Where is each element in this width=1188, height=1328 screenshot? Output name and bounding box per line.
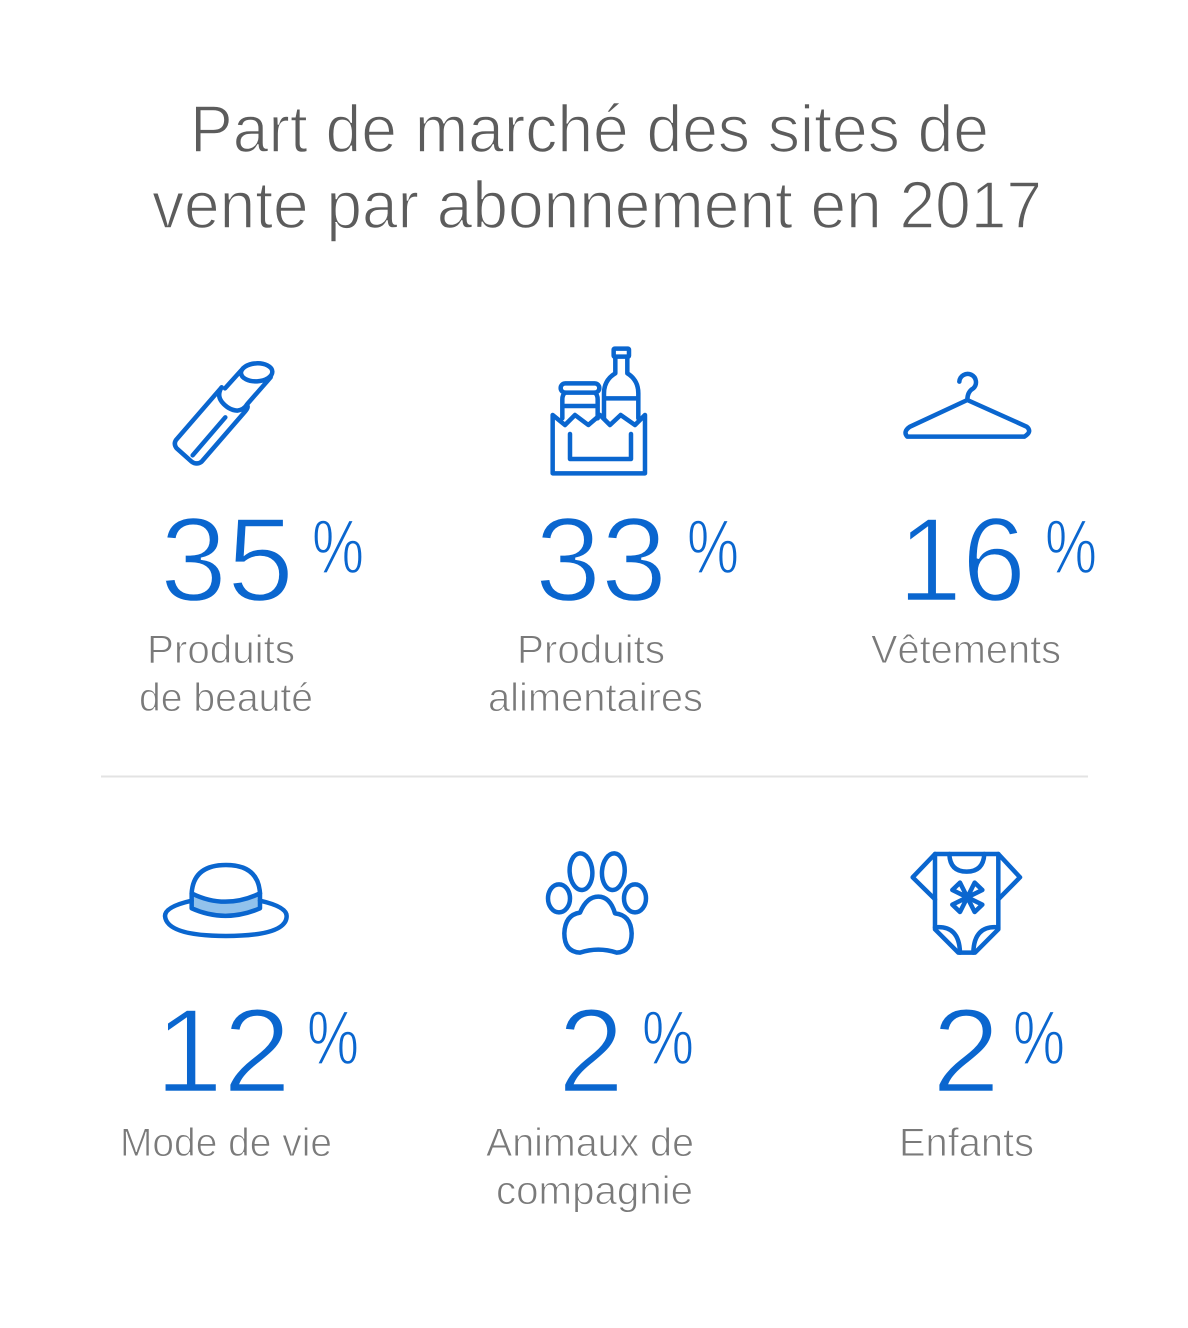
percent sign: % bbox=[1045, 505, 1097, 590]
label bbox=[486, 1121, 694, 1213]
label: alimentaires bbox=[488, 676, 703, 720]
title bbox=[152, 92, 1042, 243]
panel: enfants bbox=[899, 854, 1065, 1165]
percent sign: % bbox=[1013, 996, 1065, 1081]
panel: animaux de compagnie bbox=[486, 853, 694, 1213]
label bbox=[139, 628, 313, 720]
percentage: 12: 12 bbox=[155, 984, 291, 1118]
title: Part de marché des sites de bbox=[190, 92, 989, 167]
icon: baby onesie bbox=[913, 854, 1020, 953]
label: Mode de vie bbox=[120, 1121, 332, 1165]
panel: produits alimentaires bbox=[488, 349, 739, 720]
percent sign: % bbox=[687, 505, 739, 590]
percentage: 2: 2 bbox=[932, 984, 1000, 1118]
label: Enfants bbox=[899, 1121, 1034, 1165]
icon: hanger bbox=[906, 374, 1029, 437]
label: compagnie bbox=[496, 1169, 693, 1213]
label: Produits bbox=[147, 628, 295, 672]
panel: produits de beauté bbox=[139, 363, 364, 720]
label: Vêtements bbox=[871, 628, 1061, 672]
icon: grocery bag bbox=[553, 349, 645, 473]
percentage: 33: 33 bbox=[535, 493, 667, 627]
label bbox=[488, 628, 703, 720]
percentage: 16: 16 bbox=[898, 493, 1026, 627]
icon: lipstick bbox=[175, 363, 273, 463]
percent sign: % bbox=[307, 996, 359, 1081]
label: Produits bbox=[517, 628, 665, 672]
panel: mode de vie bbox=[120, 865, 359, 1165]
percent sign: % bbox=[642, 996, 694, 1081]
divider bbox=[101, 776, 1088, 778]
percentage: 2: 2 bbox=[558, 984, 624, 1118]
label: de beauté bbox=[139, 676, 313, 720]
title: vente par abonnement en 2017 bbox=[152, 168, 1042, 243]
icon: paw bbox=[548, 853, 646, 953]
icon: hat bbox=[165, 865, 287, 936]
percent sign: % bbox=[312, 505, 364, 590]
panel: vêtements bbox=[871, 374, 1097, 672]
label: Animaux de bbox=[486, 1121, 694, 1165]
percentage: 35: 35 bbox=[160, 493, 294, 627]
